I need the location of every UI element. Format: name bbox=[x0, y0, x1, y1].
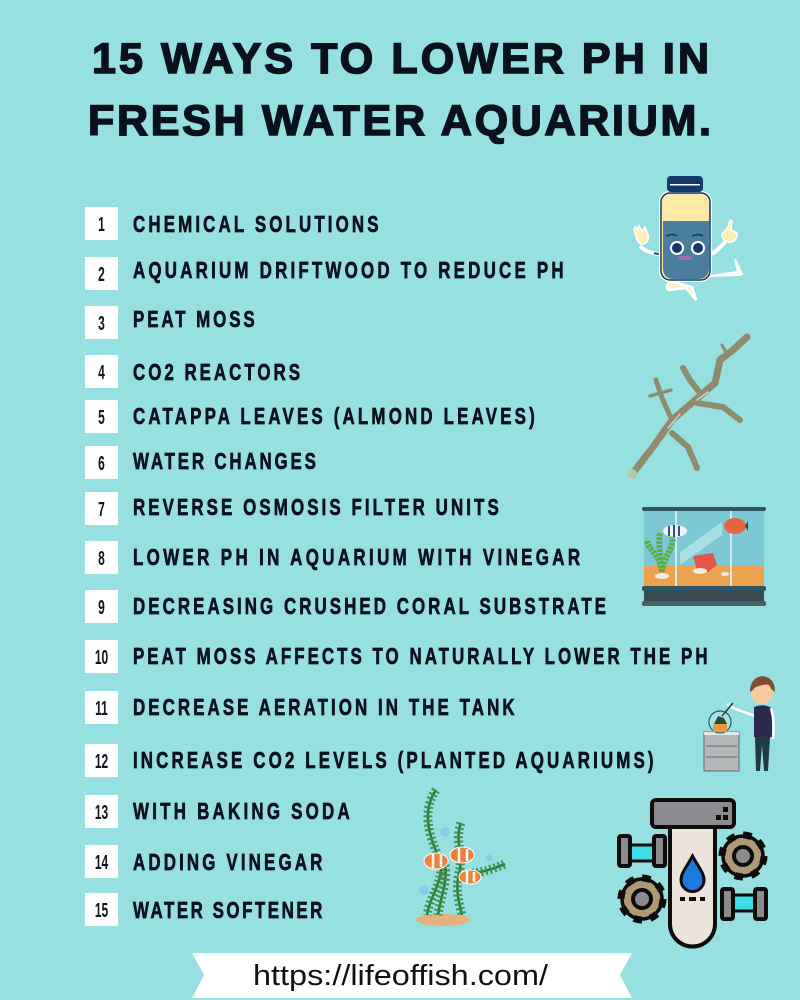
item 1: 1 bbox=[98, 214, 105, 236]
item 2: AQUARIUM DRIFTWOOD TO REDUCE PH bbox=[133, 257, 564, 284]
title: 15 WAYS TO LOWER PH IN bbox=[92, 35, 709, 83]
item 13: 13 bbox=[95, 802, 108, 824]
banner: website url bbox=[192, 953, 632, 998]
item 12: 12 bbox=[95, 751, 108, 773]
item 13 bbox=[85, 795, 350, 828]
item 14 bbox=[85, 845, 323, 878]
item 7: REVERSE OSMOSIS FILTER UNITS bbox=[133, 494, 499, 521]
icon: man with fish bowl bbox=[704, 676, 775, 771]
icon: bottle character bbox=[634, 176, 742, 300]
item 1 bbox=[85, 207, 379, 240]
item 11: 11 bbox=[95, 698, 108, 720]
tube bbox=[670, 826, 715, 947]
item 9: DECREASING CRUSHED CORAL SUBSTRATE bbox=[133, 593, 606, 620]
icon: driftwood bbox=[627, 337, 747, 479]
item 11: DECREASE AERATION IN THE TANK bbox=[133, 694, 515, 721]
item 14: ADDING VINEGAR bbox=[133, 849, 323, 876]
item 2: 2 bbox=[98, 264, 105, 286]
item 4: CO2 REACTORS bbox=[133, 359, 300, 386]
item 6 bbox=[85, 446, 316, 479]
gear left bbox=[621, 878, 663, 920]
item 8: 8 bbox=[98, 548, 105, 570]
icon: water softener bbox=[619, 800, 766, 947]
icon: fish tank bbox=[642, 507, 766, 606]
item 6: WATER CHANGES bbox=[133, 448, 316, 475]
item 3 bbox=[85, 306, 255, 339]
item 9: 9 bbox=[98, 597, 105, 619]
item 3: 3 bbox=[98, 313, 105, 335]
banner: website url: https://lifeoffish.com/ bbox=[253, 960, 549, 992]
title: FRESH WATER AQUARIUM. bbox=[88, 97, 711, 145]
drawers bbox=[704, 732, 739, 771]
right pipe bbox=[722, 889, 766, 919]
icon: aquatic plant with clownfish bbox=[416, 790, 505, 926]
item 1: CHEMICAL SOLUTIONS bbox=[133, 211, 379, 238]
title bbox=[88, 35, 711, 145]
item 14: 14 bbox=[95, 852, 109, 874]
item 12: INCREASE CO2 LEVELS (PLANTED AQUARIUMS) bbox=[133, 747, 654, 774]
list of 15 ways bbox=[85, 207, 708, 926]
item 15 bbox=[85, 893, 323, 926]
water drop bbox=[681, 856, 704, 892]
item 13: WITH BAKING SODA bbox=[133, 798, 350, 825]
left pipe bbox=[619, 836, 665, 866]
item 7: 7 bbox=[98, 499, 105, 521]
item 4 bbox=[85, 355, 300, 388]
item 5: 5 bbox=[98, 407, 105, 429]
item 15: WATER SOFTENER bbox=[133, 897, 323, 924]
head bbox=[652, 800, 734, 827]
item 4: 4 bbox=[98, 362, 105, 384]
item 6: 6 bbox=[98, 453, 105, 475]
item 8: LOWER PH IN AQUARIUM WITH VINEGAR bbox=[133, 544, 580, 571]
item 5: CATAPPA LEAVES (ALMOND LEAVES) bbox=[133, 403, 535, 430]
gear right bbox=[722, 835, 764, 877]
item 15: 15 bbox=[95, 900, 108, 922]
fish bowl bbox=[709, 711, 731, 733]
plant in tank bbox=[647, 532, 673, 572]
item 3: PEAT MOSS bbox=[133, 306, 255, 333]
item 10: PEAT MOSS AFFECTS TO NATURALLY LOWER THE PH bbox=[133, 643, 708, 670]
item 10: 10 bbox=[95, 647, 108, 669]
